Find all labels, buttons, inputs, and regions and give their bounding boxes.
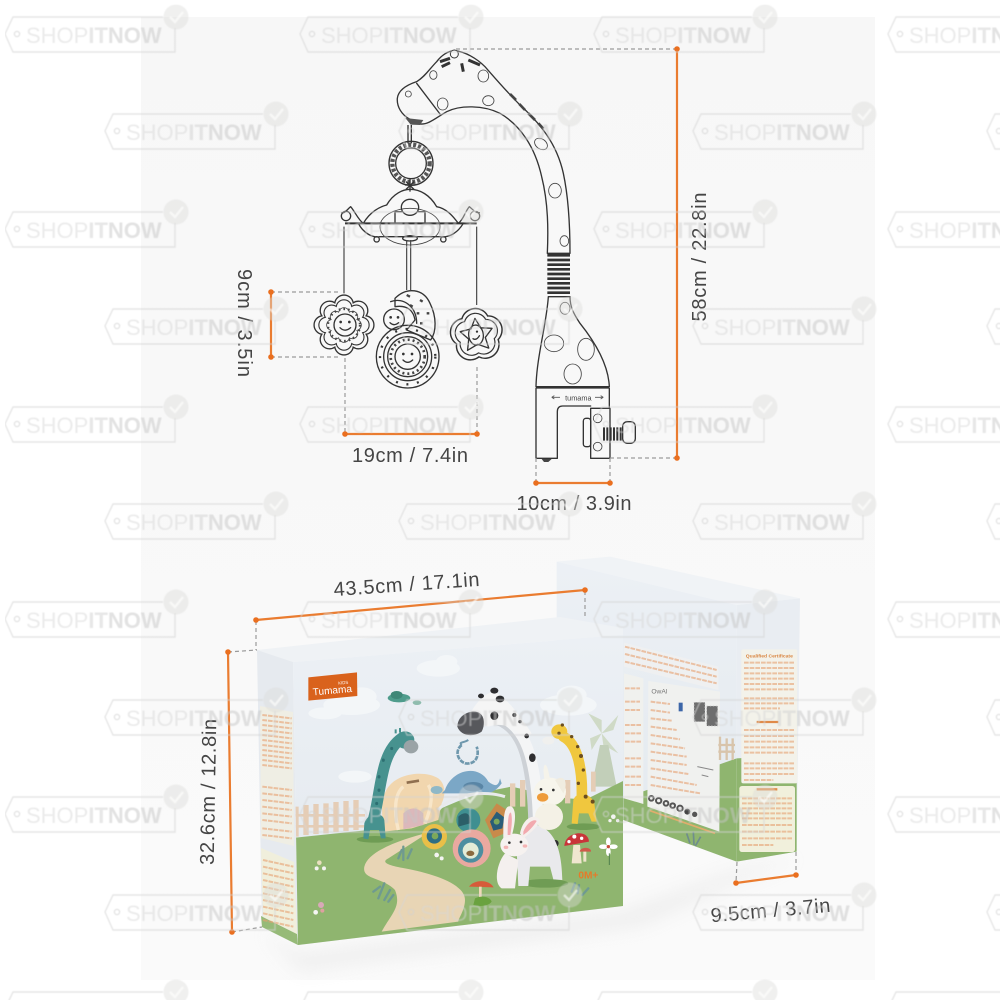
- age mark: 0M+: [578, 871, 598, 882]
- yellow giraffe: [551, 723, 600, 830]
- back box long face: [557, 562, 737, 862]
- ring rattle: [389, 125, 433, 192]
- back box short face: [737, 598, 800, 862]
- logo badge: Tumama: [312, 684, 353, 698]
- dimension: toy height: 9cm / 3.5in: [233, 269, 255, 377]
- dimension: box length: [253, 569, 588, 650]
- watermark pattern: SHOPITNOW: [420, 315, 556, 340]
- watermark pattern: SHOPITNOW: [615, 23, 751, 48]
- watermark pattern: SHOPITNOW: [420, 901, 556, 926]
- watermark pattern: SHOPITNOW: [26, 413, 162, 438]
- watermark pattern: SHOPITNOW: [126, 510, 262, 535]
- watermark pattern: SHOPITNOW: [321, 803, 457, 828]
- grass: [296, 781, 623, 945]
- UFO logo mark: [388, 691, 421, 705]
- front face artwork: [288, 630, 628, 957]
- dimension: clamp width: [516, 458, 632, 515]
- watermark pattern: SHOPITNOW: [615, 218, 751, 243]
- watermark pattern: SHOPITNOW: [321, 218, 457, 243]
- toy: sun flower: [314, 295, 374, 355]
- watermark pattern: SHOPITNOW: [26, 608, 162, 633]
- back box long face: OwAl: [651, 688, 668, 695]
- watermark pattern: SHOPITNOW: [615, 803, 751, 828]
- watermark pattern: SHOPITNOW: [714, 315, 850, 340]
- watermark pattern: SHOPITNOW: [615, 608, 751, 633]
- back box: [557, 557, 800, 862]
- dimension: box depth: [710, 852, 831, 927]
- dimension: clamp width: 10cm / 3.9in: [516, 493, 632, 515]
- watermark pattern: SHOPITNOW: [126, 901, 262, 926]
- background panel: [141, 17, 875, 980]
- logo badge: [308, 672, 357, 701]
- dimension: toy spacing: 19cm / 7.4in: [352, 445, 468, 467]
- watermark pattern: SHOPITNOW: [615, 413, 751, 438]
- fence: [293, 772, 596, 837]
- hanging strings: [344, 227, 477, 305]
- mobile line drawing: [314, 50, 635, 462]
- clouds: [308, 655, 597, 783]
- dimension: toy height: [233, 269, 338, 377]
- watermark pattern: SHOPITNOW: [26, 218, 162, 243]
- watermark pattern: SHOPITNOW: [420, 120, 556, 145]
- back box short face: Qualified Certificate: [746, 653, 793, 659]
- toy: moon: [384, 291, 435, 340]
- dimension: box height: 32.6cm / 12.8in: [197, 719, 221, 865]
- teal giraffe: [357, 728, 418, 843]
- watermark pattern: SHOPITNOW: [26, 23, 162, 48]
- watermark pattern: SHOPITNOW: [714, 901, 850, 926]
- dimension: box height: [197, 649, 262, 935]
- box shadow: [262, 858, 800, 970]
- zebra arm toy: [457, 688, 559, 847]
- clamp base: [536, 297, 635, 462]
- logo badge: KIDS: [338, 680, 349, 686]
- watermark pattern: SHOPITNOW: [126, 120, 262, 145]
- watermark pattern: SHOPITNOW: [714, 510, 850, 535]
- front box: [257, 617, 628, 957]
- giraffe arm outline: [397, 50, 570, 253]
- dimension: box length: 43.5cm / 17.1in: [333, 569, 480, 601]
- watermark pattern: SHOPITNOW: [714, 706, 850, 731]
- toy: star flower: [448, 306, 505, 362]
- watermark pattern: SHOPITNOW: [420, 706, 556, 731]
- bread house: [382, 774, 444, 832]
- watermark pattern: SHOPITNOW: [420, 510, 556, 535]
- windmill: [588, 713, 618, 787]
- watermark pattern: SHOPITNOW: [321, 23, 457, 48]
- front box side face: [257, 650, 298, 945]
- toy: round sun: [376, 325, 439, 388]
- grass tufts: [373, 847, 588, 902]
- dimension: box depth: 9.5cm / 3.7in: [710, 895, 831, 927]
- dimension: total height: 58cm / 22.8in: [689, 192, 711, 322]
- watermark pattern: SHOPITNOW: [126, 706, 262, 731]
- dimension: toy spacing: [342, 358, 480, 467]
- hanging ring and carousel: [431, 740, 505, 810]
- back box top face: [557, 557, 800, 605]
- white body and duck: [517, 765, 568, 888]
- watermark pattern: SHOPITNOW: [126, 315, 262, 340]
- spring joint: [547, 255, 570, 293]
- watermark pattern: SHOPITNOW: [26, 803, 162, 828]
- mushrooms and flowers: [313, 814, 619, 915]
- clamp base: tumama: [565, 393, 592, 402]
- watermark pattern: SHOPITNOW: [321, 608, 457, 633]
- path: [364, 833, 465, 932]
- rabbit: [497, 806, 540, 888]
- front box top face: [257, 617, 623, 662]
- watermark pattern: SHOPITNOW: [714, 120, 850, 145]
- watermark pattern: SHOPITNOW: [321, 413, 457, 438]
- hanging toys: [422, 803, 512, 867]
- carousel body: [341, 189, 480, 245]
- dimension: total height: [456, 46, 711, 461]
